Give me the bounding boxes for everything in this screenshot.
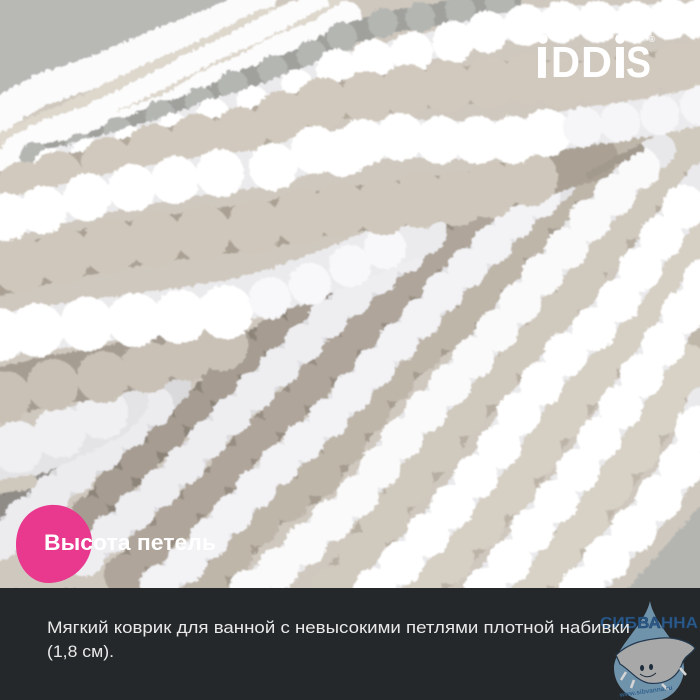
mascot eyes	[640, 664, 653, 671]
bathtub mascot	[616, 638, 695, 683]
logo: iDDiS: ®	[649, 35, 655, 44]
mascot legs	[621, 668, 686, 690]
first fold: thin top rows	[0, 0, 347, 165]
second fold: beige row	[0, 342, 225, 397]
logo: iDDiS: D	[551, 38, 580, 87]
logo: iDDiS: D	[581, 38, 612, 87]
second fold: under white row	[0, 400, 125, 487]
description text: Мягкий коврик для ванной с невысокими петлями плотной набивки	[47, 618, 630, 637]
watermark url: www.sibvanna.ru	[618, 685, 673, 699]
logo: iDDiS: i	[534, 26, 550, 91]
gray mat corner	[0, 0, 240, 105]
watermark: sibvanna logo	[600, 601, 698, 700]
brown shadow spot under fold	[590, 148, 640, 175]
description text: (1,8 см).	[47, 642, 114, 661]
badge heading: Высота петель	[44, 530, 216, 555]
dark description panel	[0, 588, 700, 700]
logo: iDDiS	[534, 26, 655, 91]
description text	[47, 618, 630, 661]
logo: iDDiS: S	[626, 38, 651, 87]
first fold: lower beige row	[0, 158, 595, 275]
pink circle badge	[16, 505, 92, 583]
bottom-right gray stripe	[625, 500, 700, 592]
mascot smile	[640, 673, 656, 677]
water drop	[614, 601, 684, 700]
beige stripes	[0, 135, 700, 590]
watermark name: СИБВАННА	[600, 615, 698, 632]
second fold: white row	[0, 232, 425, 335]
first fold: gray row	[35, 0, 510, 157]
first fold: upper beige row	[0, 60, 700, 192]
white stripes	[0, 150, 700, 590]
logo: iDDiS: i	[612, 26, 628, 91]
first fold: big white row	[0, 105, 700, 222]
first fold: upper white row	[50, 17, 700, 164]
